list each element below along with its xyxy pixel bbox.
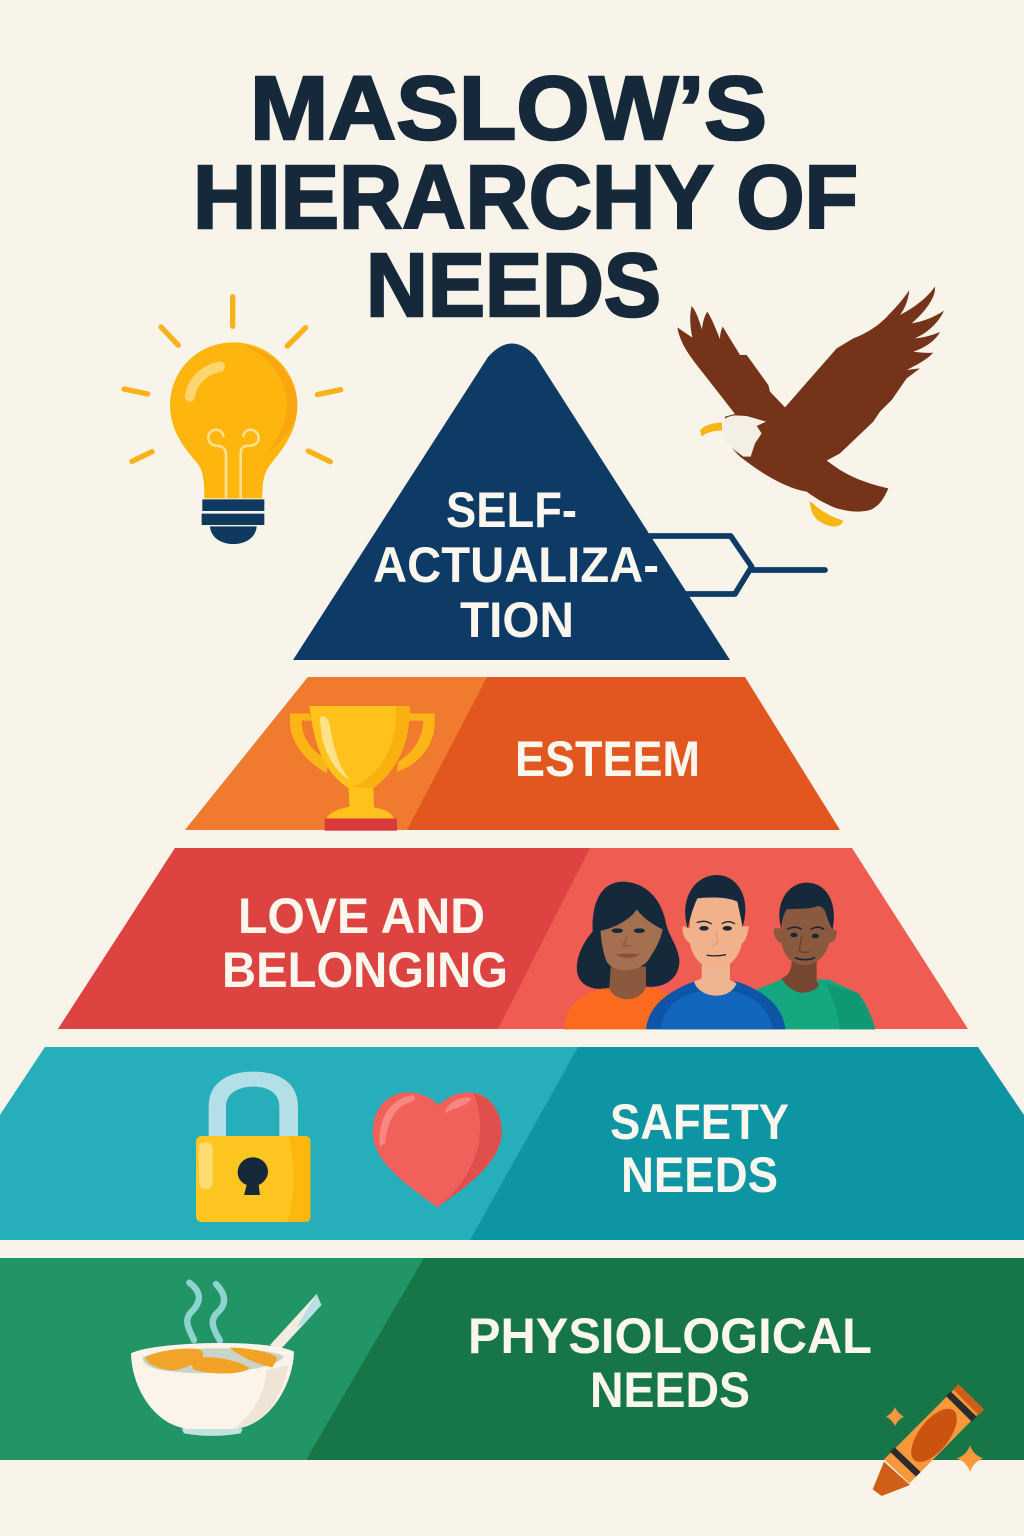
icon: crayon with sparkles (873, 1384, 984, 1496)
icon: heart (373, 1092, 502, 1207)
label: physiological needs: PHYSIOLOGICAL (468, 1308, 872, 1364)
label: self-actualization: ACTUALIZA- (373, 537, 659, 593)
label: esteem: ESTEEM (515, 731, 700, 787)
pyramid tier: esteem (185, 677, 840, 831)
label: self-actualization: SELF- (446, 482, 577, 538)
pyramid tier: love and belonging (58, 848, 968, 1029)
person: man in blue (646, 875, 785, 1029)
person: man in teal (757, 883, 875, 1029)
label: safety needs (610, 1094, 789, 1203)
label: physiological needs: NEEDS (590, 1362, 750, 1418)
title: MASLOW’S (250, 59, 767, 159)
label: love and belonging (222, 888, 508, 998)
icon: padlock (196, 1072, 310, 1222)
label: love and belonging: LOVE AND (238, 888, 485, 944)
icon: trophy (290, 706, 435, 831)
icon: light bulb (124, 297, 341, 544)
label: safety needs: NEEDS (621, 1147, 778, 1203)
label: safety needs: SAFETY (610, 1094, 789, 1150)
label: self-actualization (373, 482, 659, 648)
bracket connector (650, 536, 825, 594)
pyramid tier: self-actualization (293, 344, 825, 660)
icon: three people (564, 875, 875, 1029)
title: HIERARCHY OF (193, 148, 858, 248)
title (193, 59, 858, 336)
person: woman (564, 882, 679, 1029)
pyramid tier: safety needs (0, 1047, 1024, 1240)
label: self-actualization: TION (460, 592, 574, 648)
title: NEEDS (366, 236, 661, 336)
label: love and belonging: BELONGING (222, 942, 508, 998)
icon: eagle (677, 287, 944, 527)
pyramid tier: physiological needs (0, 1258, 1024, 1460)
icon: soup bowl (131, 1283, 321, 1436)
label: physiological needs (468, 1308, 872, 1418)
